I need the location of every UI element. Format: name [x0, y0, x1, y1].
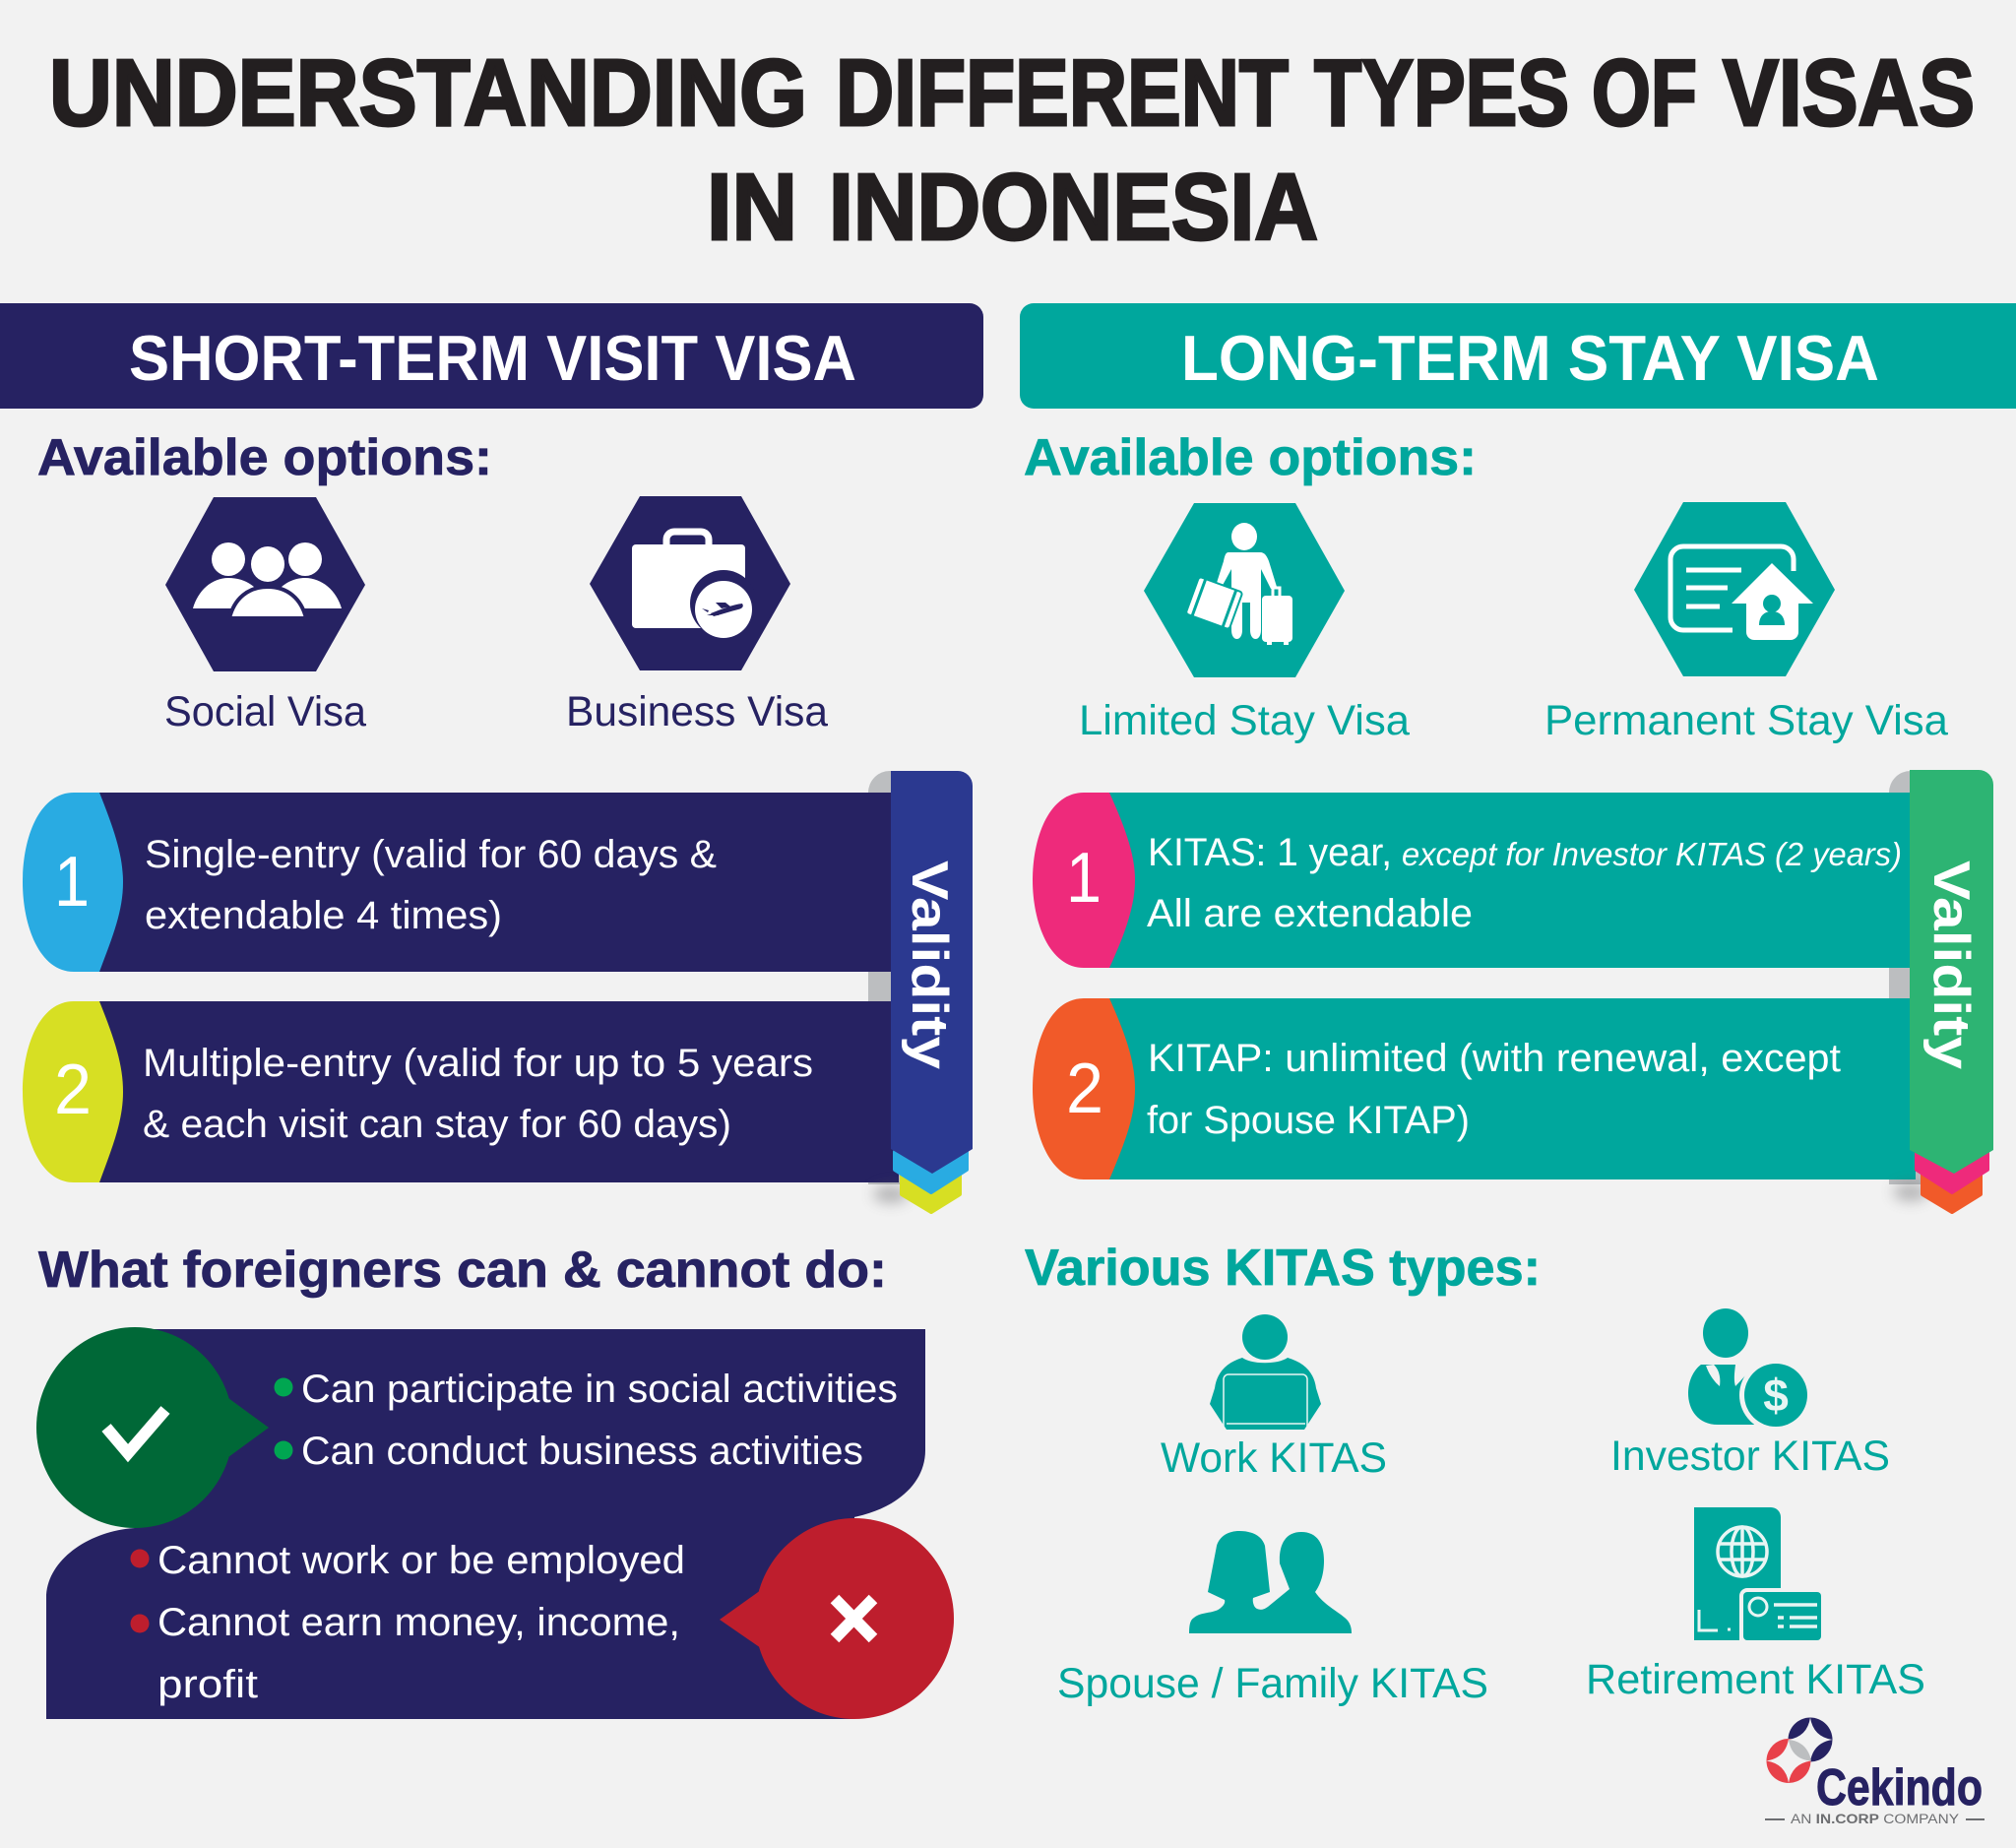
icon: work kitas: [1210, 1314, 1321, 1430]
panel: long-term stay visa: [1020, 303, 2016, 1707]
icon: limited stay visa: [1144, 503, 1345, 677]
heading: short-term visit visa: [0, 303, 983, 409]
title: INDONESIA: [829, 155, 1318, 260]
number badge 2: 2: [54, 1051, 92, 1129]
option bar 2: [23, 1001, 899, 1182]
heading: long-term stay visa: LONG-TERM STAY VISA: [1181, 322, 1879, 394]
cannot list: profit: [158, 1663, 258, 1706]
label: investor kitas: Investor KITAS: [1610, 1433, 1890, 1480]
icon: check bubble: [36, 1327, 269, 1528]
title: [49, 40, 1975, 260]
logo: cekindo: Cekindo: [1816, 1759, 1983, 1816]
can list: [274, 1368, 898, 1473]
label: business visa: Business Visa: [566, 688, 828, 735]
label: work kitas: Work KITAS: [1161, 1434, 1387, 1482]
icon: spouse family kitas: [1189, 1531, 1352, 1633]
title: VISAS: [1723, 40, 1975, 146]
can and cannot panel: [36, 1327, 954, 1719]
heading: short-term visit visa: SHORT-TERM VISIT VISA: [129, 322, 856, 394]
option bar 1: KITAS: 1 year,: [1148, 831, 1392, 874]
number badge 2: [1033, 998, 1135, 1179]
option bar 1: Single-entry (valid for 60 days &: [145, 833, 717, 876]
title: TYPES: [1314, 40, 1569, 146]
cannot list: Cannot work or be employed: [158, 1539, 685, 1582]
option bar 2: KITAP: unlimited (with renewal, except: [1148, 1037, 1841, 1080]
option bar 2: for Spouse KITAP): [1147, 1099, 1470, 1142]
panel: short-term visit visa: [0, 303, 983, 1719]
icon: social visa: [165, 497, 365, 671]
icon: permanent stay visa: [1634, 502, 1835, 676]
validity ribbon: [1893, 770, 1993, 1212]
number badge 1: 1: [54, 843, 90, 922]
icon: retirement kitas: [1694, 1507, 1821, 1640]
heading: available options: Available options:: [1024, 429, 1477, 486]
validity ribbon: [873, 771, 973, 1212]
label: permanent stay visa: Permanent Stay Visa: [1544, 697, 1948, 744]
ribbon backing: [868, 771, 906, 1184]
icon: investor kitas: [1688, 1308, 1812, 1432]
logo: cekindo: [1765, 1717, 1984, 1826]
label: social visa: Social Visa: [164, 688, 366, 735]
number badge 1: 1: [1066, 839, 1102, 918]
can list: Can conduct business activities: [301, 1430, 863, 1473]
title: IN: [707, 155, 797, 260]
logo: cekindo: AN IN.CORP COMPANY: [1791, 1812, 1959, 1826]
option bar 1: [23, 793, 896, 972]
title: DIFFERENT: [836, 40, 1289, 146]
option bar 1: except for Investor KITAS (2 years): [1402, 836, 1902, 872]
option bar 2: [1033, 998, 1916, 1179]
validity ribbon: Validity: [1922, 860, 1980, 1069]
heading: available options: Available options:: [37, 429, 492, 486]
number badge 2: [23, 1001, 123, 1182]
label: retirement kitas: Retirement KITAS: [1586, 1656, 1925, 1703]
cannot list: [130, 1539, 685, 1706]
icon: investor kitas: $: [1763, 1370, 1789, 1421]
number badge 2: 2: [1066, 1050, 1103, 1128]
ribbon backing: [1889, 771, 1924, 1184]
option bar 2: Multiple-entry (valid for up to 5 years: [143, 1042, 813, 1085]
label: spouse family kitas: Spouse / Family KITAS: [1057, 1660, 1488, 1707]
title: OF: [1592, 40, 1697, 146]
option bar 2: & each visit can stay for 60 days): [143, 1103, 731, 1146]
number badge 1: [23, 793, 123, 972]
number badge 1: [1033, 793, 1135, 968]
validity ribbon: Validity: [901, 860, 958, 1069]
cannot list: Cannot earn money, income,: [158, 1601, 680, 1644]
option bar 1: All are extendable: [1147, 892, 1473, 935]
title: UNDERSTANDING: [49, 40, 807, 146]
heading: long-term stay visa: [1020, 303, 2016, 409]
option bar 1: extendable 4 times): [145, 894, 502, 937]
icon: business visa: [590, 496, 790, 670]
can list: Can participate in social activities: [301, 1368, 898, 1411]
icon: cross bubble: [720, 1518, 954, 1719]
option bar 1: [1033, 793, 1914, 968]
heading: what foreigners can and cannot do: What foreigners can & cannot do:: [38, 1242, 887, 1299]
label: limited stay visa: Limited Stay Visa: [1079, 697, 1410, 744]
heading: various kitas types: Various KITAS types:: [1025, 1240, 1541, 1297]
